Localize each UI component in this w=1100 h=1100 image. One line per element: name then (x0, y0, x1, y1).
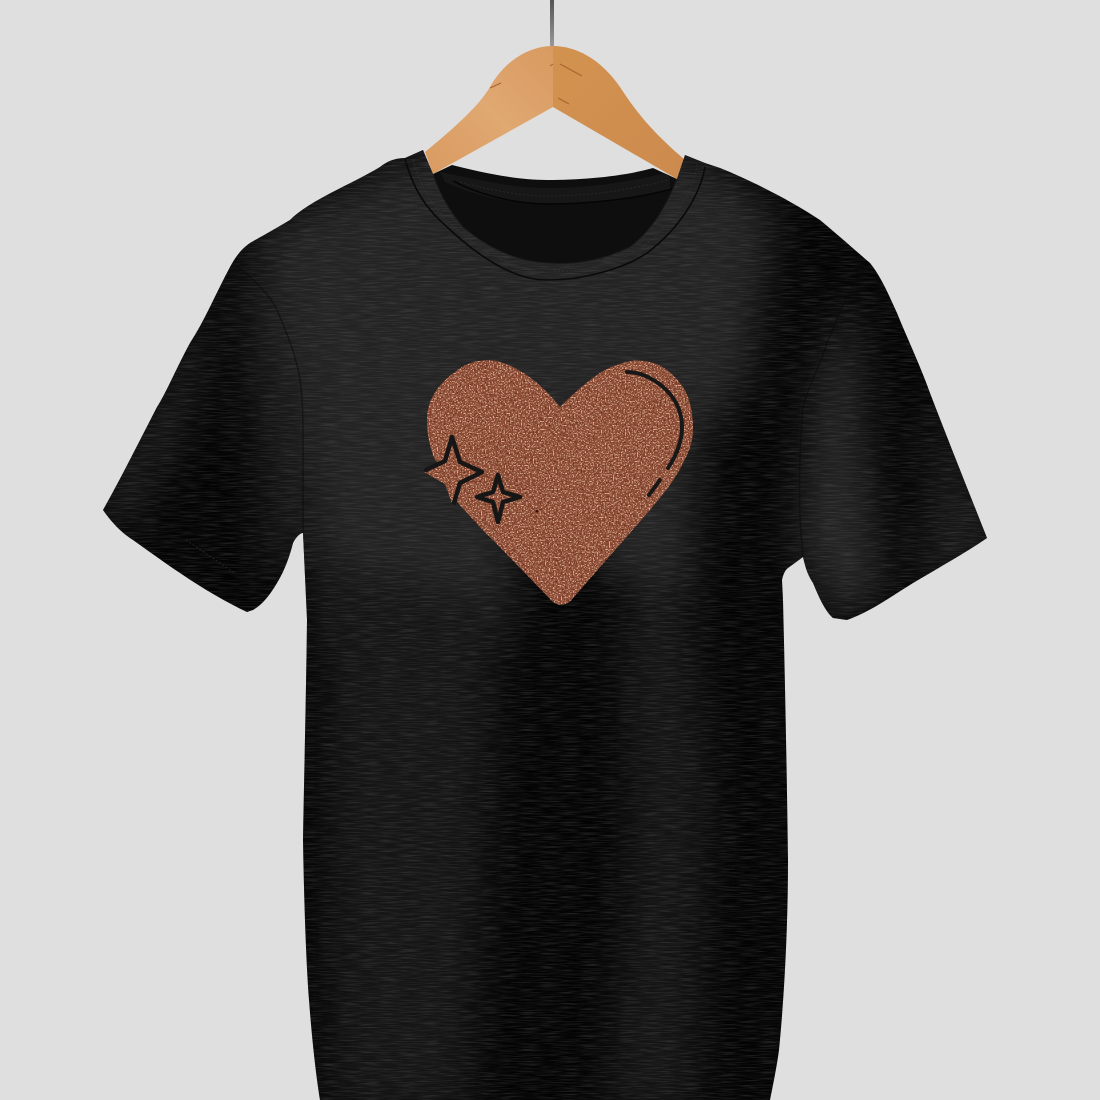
t-shirt body and sleeves (103, 150, 987, 1100)
highlight dash (649, 480, 660, 495)
glitter heart fill (424, 360, 693, 605)
dark speck (536, 510, 538, 512)
back of collar, inside the neck (433, 165, 677, 264)
large sparkle outline (426, 437, 482, 503)
wooden hanger (425, 46, 685, 179)
heart print (424, 360, 693, 605)
fabric heather texture (90, 140, 1000, 1100)
front neck ribbing with stitching (405, 159, 705, 280)
sleeve seams (233, 263, 870, 557)
small sparkle outline (477, 475, 520, 522)
highlight arc (627, 372, 682, 468)
hook wire (550, 0, 554, 47)
